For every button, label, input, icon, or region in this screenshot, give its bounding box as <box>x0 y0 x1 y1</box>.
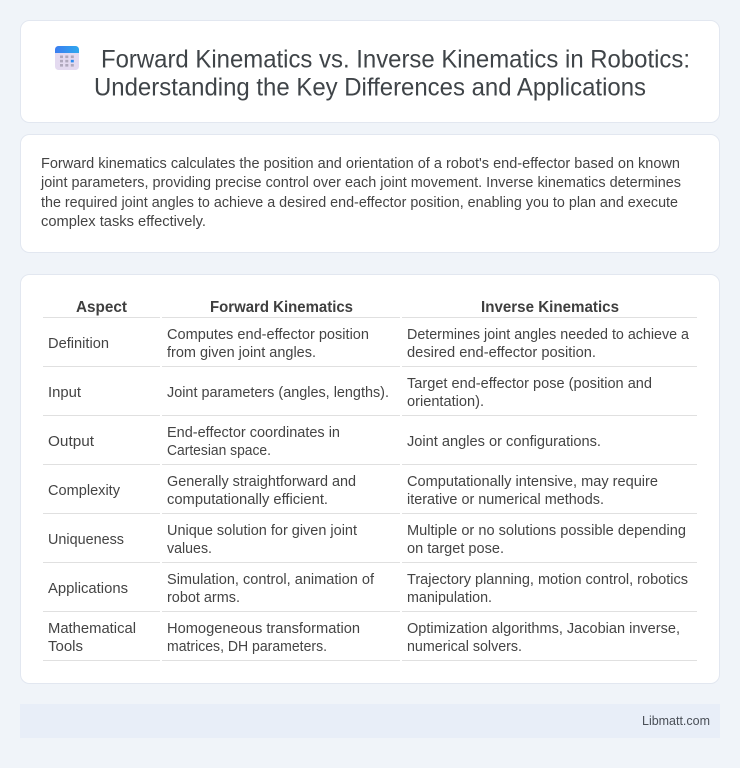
table row: uniqueness: Multiple or no solutions possible depending <box>407 523 686 539</box>
table row: uniqueness: Uniqueness <box>48 532 124 548</box>
table row: mathematical tools: Mathematical <box>48 621 136 637</box>
table row: applications <box>48 572 688 606</box>
table row: uniqueness: values. <box>167 541 212 557</box>
table row: applications: Simulation, control, animation of <box>167 572 375 588</box>
table row: complexity: Generally straightforward and <box>167 474 356 490</box>
icon: calendar grid <box>55 46 79 70</box>
table row: input: orientation). <box>407 394 484 410</box>
table row: input <box>48 376 652 410</box>
table row: complexity: iterative or numerical methods. <box>407 492 604 508</box>
table row: input: Input <box>48 385 81 401</box>
table row: complexity <box>48 474 658 508</box>
table row: definition: Determines joint angles needed to achieve a <box>407 327 690 343</box>
table row: complexity: Complexity <box>48 483 121 499</box>
table row: applications: Trajectory planning, motion control, robotics <box>407 572 688 588</box>
table row: complexity: Computationally intensive, may require <box>407 474 658 490</box>
title: Understanding the Key Differences and Applications <box>94 74 646 102</box>
table header <box>76 299 619 316</box>
table row: definition: Definition <box>48 336 109 352</box>
table row: uniqueness: on target pose. <box>407 541 504 557</box>
panel: comparison table card <box>20 274 720 684</box>
text block: introduction: joint parameters, providing precise control over each joint movement. Inverse kinematics determines <box>40 175 681 191</box>
text block: introduction: the required joint angles to achieve a desired end-effector position, enabling you to plan and execute <box>41 195 678 211</box>
text block: introduction: complex tasks effectively. <box>41 214 206 230</box>
table row: definition: desired end-effector position. <box>407 345 596 361</box>
footer text: source: Libmatt.com <box>642 714 710 728</box>
title: Forward Kinematics vs. Inverse Kinematics in Robotics: <box>101 46 690 74</box>
table row: definition: Computes end-effector position <box>167 327 369 343</box>
text block: introduction: Forward kinematics calculates the position and orientation of a robot's end-effector based on known <box>41 156 680 172</box>
table row: definition: from given joint angles. <box>167 345 316 361</box>
table row: applications: manipulation. <box>407 590 492 606</box>
table row: mathematical tools: Homogeneous transformation <box>167 621 360 637</box>
table row: mathematical tools: numerical solvers. <box>407 639 522 655</box>
table header: Aspect <box>76 299 127 316</box>
text block: introduction <box>40 156 681 230</box>
table row: uniqueness: Unique solution for given joint <box>167 523 357 539</box>
footer bar <box>20 704 720 738</box>
table header: Forward Kinematics <box>210 299 353 316</box>
panel: header card <box>20 20 720 122</box>
table row: input: Joint parameters (angles, lengths). <box>167 385 389 401</box>
title <box>94 46 690 102</box>
table row: mathematical tools: Optimization algorithms, Jacobian inverse, <box>407 621 680 637</box>
table row: output <box>48 425 601 459</box>
table row: complexity: computationally efficient. <box>167 492 328 508</box>
table row: definition <box>48 327 690 361</box>
table row: output: Cartesian space. <box>167 443 271 459</box>
table row: mathematical tools: Tools <box>48 639 83 655</box>
table row: uniqueness <box>48 523 686 557</box>
panel: introduction card <box>20 134 720 252</box>
table header: Inverse Kinematics <box>481 299 619 316</box>
table row: mathematical tools <box>48 621 680 655</box>
table row: output: Output <box>48 434 94 450</box>
table row: output: Joint angles or configurations. <box>407 434 601 450</box>
table row: output: End-effector coordinates in <box>167 425 340 441</box>
table row: applications: robot arms. <box>167 590 240 606</box>
table row: input: Target end-effector pose (position and <box>407 376 652 392</box>
table row: applications: Applications <box>48 581 128 597</box>
table row: mathematical tools: matrices, DH parameters. <box>167 639 327 655</box>
